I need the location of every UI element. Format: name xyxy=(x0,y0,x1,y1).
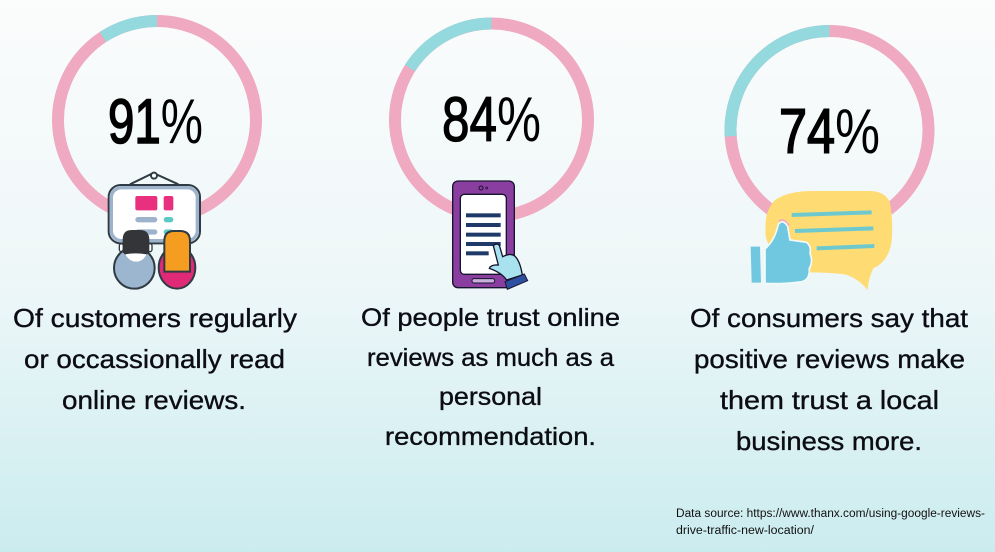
text: customers read reviews: Of customers regularly xyxy=(13,303,297,333)
ring chart: 91% xyxy=(58,21,256,219)
text: positive reviews build trust xyxy=(690,303,969,456)
icon: two people reading a board xyxy=(109,173,200,289)
text: positive reviews build trust: positive reviews make xyxy=(694,344,965,374)
text: customers read reviews: or occassionally read xyxy=(24,344,285,374)
text: customers read reviews xyxy=(13,303,297,415)
data source note: Data source: https://www.thanx.com/using-google-reviews- xyxy=(676,508,985,520)
text: trust online reviews: Of people trust online xyxy=(361,304,620,332)
text: trust online reviews xyxy=(361,304,620,451)
data source note: drive-traffic-new-location/ xyxy=(676,525,815,537)
text: trust online reviews: personal xyxy=(439,383,542,411)
text: positive reviews build trust: Of consumers say that xyxy=(690,303,969,333)
icon: thumbs up and speech bubble xyxy=(751,191,892,290)
text: positive reviews build trust: them trust a local xyxy=(720,385,939,415)
ring chart: 74% xyxy=(730,31,928,229)
icon: phone with pointing hand xyxy=(453,181,528,289)
data source note xyxy=(676,508,985,537)
ring chart: 84% xyxy=(395,23,588,217)
statistic: 91%: 91% xyxy=(108,87,203,157)
text: trust online reviews: recommendation. xyxy=(385,423,596,451)
panel: 91% of customers xyxy=(13,21,297,415)
text: customers read reviews: online reviews. xyxy=(62,385,246,415)
statistic: 74%: 74% xyxy=(779,97,880,167)
panel: 74% of consumers xyxy=(690,31,969,456)
panel: 84% of people xyxy=(361,23,620,451)
text: trust online reviews: reviews as much as a xyxy=(367,344,614,372)
statistic: 84%: 84% xyxy=(442,85,541,155)
text: positive reviews build trust: business more. xyxy=(736,426,922,456)
